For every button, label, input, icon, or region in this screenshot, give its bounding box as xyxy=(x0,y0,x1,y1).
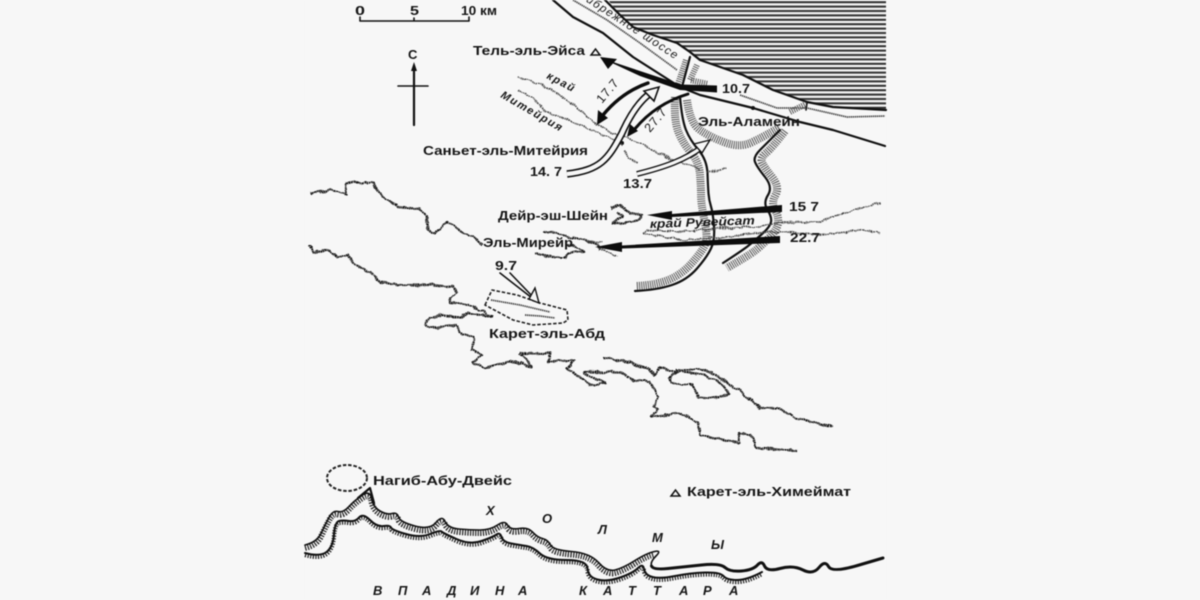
arrow: 10.7 attack towards Tell el Eisa xyxy=(600,57,717,92)
label: Deir esh Shein: Дейр-эш-Шейн xyxy=(498,209,608,223)
coastal highway and roads xyxy=(553,0,885,146)
north arrow xyxy=(398,47,428,125)
defence line hatching around El Alamein xyxy=(636,60,806,286)
scale bar: 5 xyxy=(410,4,419,18)
scale bar xyxy=(355,4,497,21)
escarpment of the Qattara depression xyxy=(305,488,883,582)
label: hills: Ы xyxy=(711,537,725,552)
label: 27.7: 27.7 xyxy=(642,105,670,135)
label: Miteiriya ridge: Митейрия xyxy=(498,89,565,135)
label: hills: М xyxy=(652,530,664,545)
label: El Mireir: Эль-Мирейр xyxy=(483,236,573,250)
label: Sanyet el Miteiriya: Саньет-эль-Митейрия xyxy=(423,144,588,158)
label: Naqb Abu Dweis: Нагиб-Абу-Двейс xyxy=(373,474,512,488)
label: hills: Л xyxy=(597,522,608,537)
label: 9.7: 9.7 xyxy=(495,259,517,273)
label: 17.7: 17.7 xyxy=(594,76,622,106)
scale bar: 10 км xyxy=(461,4,497,18)
label: Karet el Abd: Карет-эль-Абд xyxy=(489,327,605,341)
label: Ruweisat ridge: край Рувейсат xyxy=(650,213,755,231)
Miteiriya ridge outline xyxy=(517,77,727,173)
Ruweisat ridge outline xyxy=(643,203,880,240)
label: Miteiriya ridge: край xyxy=(545,70,578,95)
label: Karet el Himeimat: Карет-эль-Химеймат xyxy=(687,485,851,499)
label: hills: Х xyxy=(485,503,496,518)
scale bar: 0 xyxy=(355,4,365,18)
arrow: 22.7 attack xyxy=(595,236,780,252)
label: 13.7: 13.7 xyxy=(623,177,652,191)
hollow arrow: 13.7 attack xyxy=(637,140,710,174)
Karet el Abd dashed area xyxy=(485,290,568,325)
arrow: 17.7 counterattack xyxy=(597,83,648,125)
desert contour lines xyxy=(310,182,832,451)
label: hills: О xyxy=(542,511,552,526)
arrow: 15.7 attack xyxy=(647,205,782,220)
north arrow: С xyxy=(408,47,418,62)
defence lines xyxy=(635,97,780,291)
label: El Alamein: Эль-Аламейн xyxy=(698,115,800,129)
label: Miteiriya ridge xyxy=(498,70,578,135)
label: 10.7: 10.7 xyxy=(722,82,750,96)
label: Qattara depression: ВПАДИНА КАТТАРА xyxy=(373,583,738,598)
Naqb Abu Dweis dashed ellipse xyxy=(327,465,367,491)
arrow: 27.7 attack xyxy=(627,94,688,137)
label: 15.7: 15 7 xyxy=(789,200,819,214)
label: 22.7: 22.7 xyxy=(790,231,820,245)
label: 14.7: 14. 7 xyxy=(530,165,562,179)
Deir esh Shein depression outline xyxy=(610,205,642,223)
label: Tell el Eisa: Тель-эль-Эйса xyxy=(473,44,586,58)
map background panel xyxy=(305,0,886,600)
hollow arrow: 14.7 attack xyxy=(567,87,659,174)
arrow: 9.7 double attack xyxy=(500,273,539,303)
El Mireir depression outline xyxy=(535,232,617,258)
sea hatching xyxy=(605,0,886,110)
